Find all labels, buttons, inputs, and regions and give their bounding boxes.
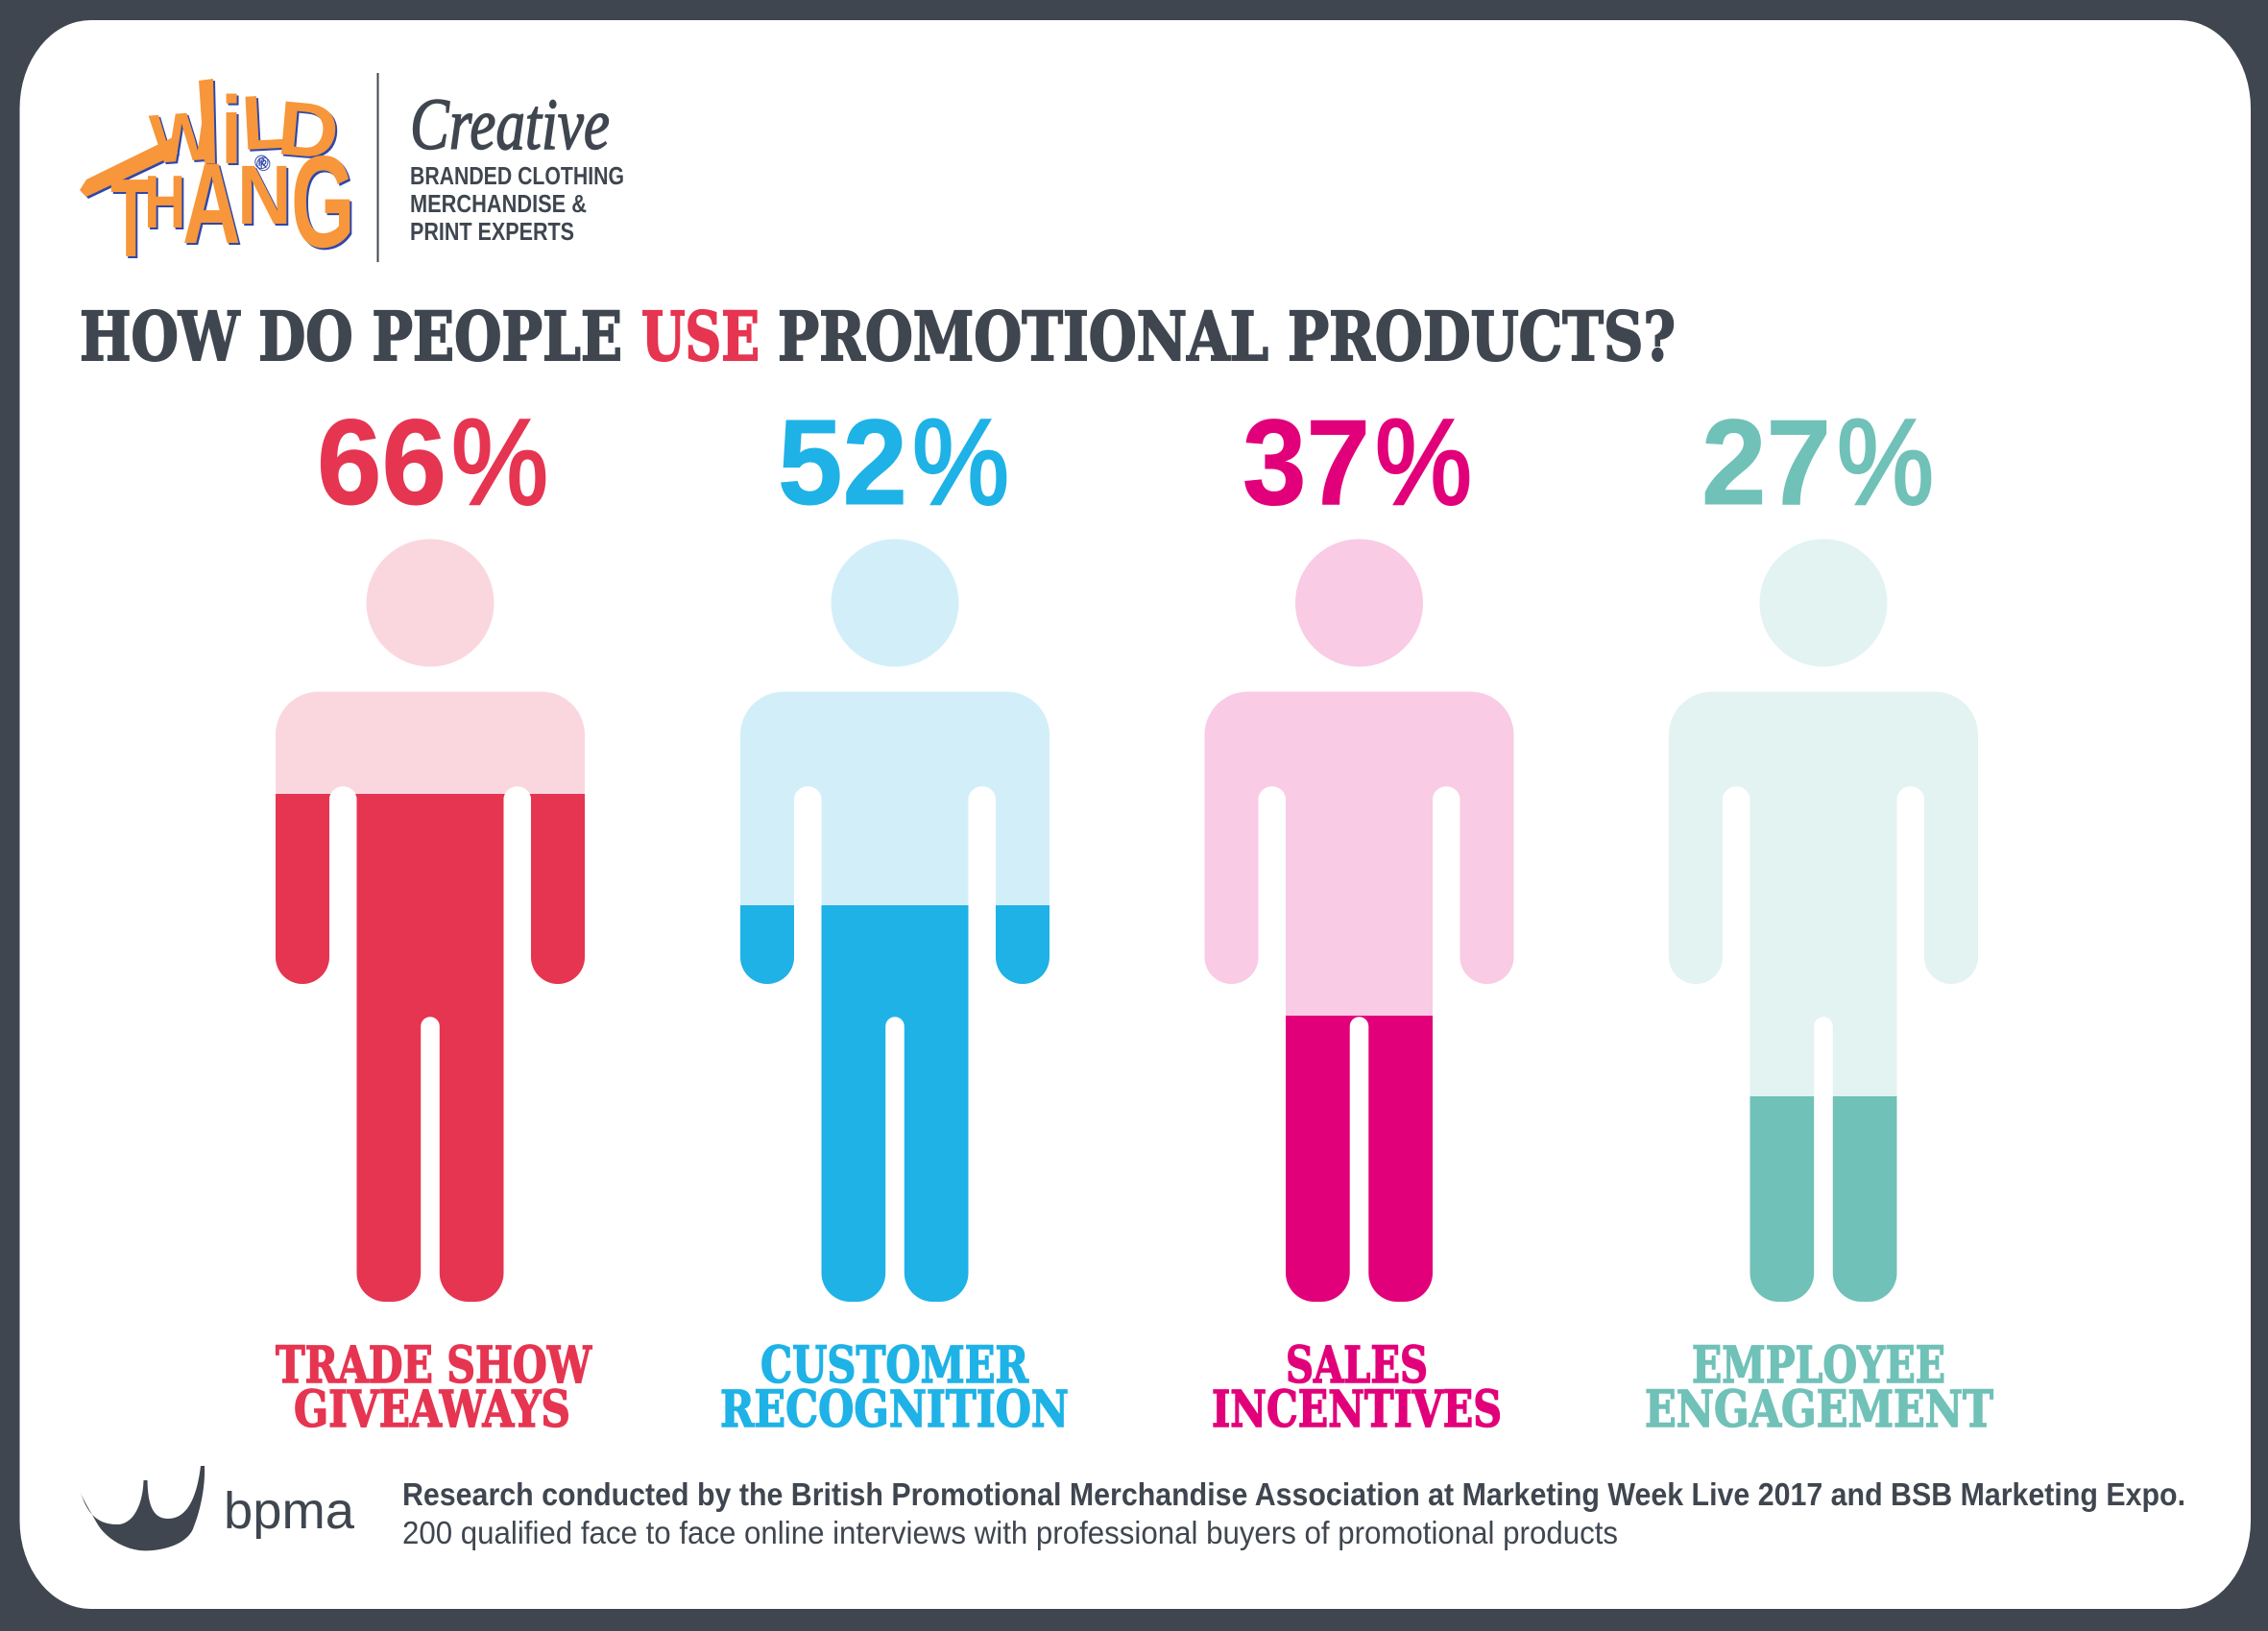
label: sales incentives: INCENTIVES — [1212, 1380, 1502, 1439]
label: trade show giveaways: GIVEAWAYS — [294, 1380, 570, 1439]
logo text: bpma: bpma — [224, 1482, 355, 1540]
logo: Wild Thang: A — [182, 138, 241, 267]
logo: Wild Thang: W — [148, 97, 218, 179]
title: PROMOTIONAL PRODUCTS? — [778, 297, 1676, 376]
percentage: 52% — [778, 395, 1009, 530]
percentage: 27% — [1701, 395, 1934, 530]
logo: Wild Thang: ® — [254, 153, 269, 174]
percentage: 37%: % — [1375, 395, 1472, 530]
person chart: 27% filled — [1669, 540, 1978, 1302]
brand tagline: Creative: Creative — [410, 84, 610, 165]
logo: Wild Thang: i — [221, 78, 242, 184]
logo: Wild Thang: G — [291, 130, 355, 276]
label: sales incentives: SALES — [1286, 1336, 1428, 1395]
title: USE — [641, 297, 760, 376]
percentage: 37%: 37 — [1243, 395, 1370, 530]
percentage: 52%: 52 — [778, 395, 907, 530]
title: HOW DO PEOPLE — [80, 297, 622, 376]
logo: Wild Thang — [80, 78, 355, 280]
percentage: 66%: % — [451, 395, 548, 530]
logo: Wild Thang: L — [239, 79, 291, 166]
label: customer recognition: CUSTOMER — [760, 1336, 1029, 1395]
logo: Wild Thang: H — [144, 159, 185, 244]
label: employee engagement: EMPLOYEE — [1692, 1336, 1945, 1395]
brand tagline: Creative: BRANDED CLOTHING — [410, 161, 624, 190]
person chart: 37% filled — [1204, 540, 1513, 1302]
percentage: 27%: 27 — [1701, 395, 1831, 530]
label: employee engagement: ENGAGEMENT — [1645, 1380, 1993, 1439]
person chart: 66% filled — [276, 540, 585, 1302]
logo: Wild Thang: D — [275, 84, 343, 176]
label: trade show giveaways — [276, 1336, 592, 1439]
person chart: 52% filled — [740, 540, 1050, 1302]
panel: sales incentives — [1204, 395, 1513, 1439]
panel: trade show giveaways — [276, 395, 592, 1439]
source note: 200 qualified face to face online interviews with professional buyers of promotional products — [402, 1515, 1618, 1550]
panel: employee engagement — [1645, 395, 1993, 1439]
panel: customer recognition — [720, 395, 1069, 1439]
percentage: 66%: 66 — [317, 395, 446, 530]
label: customer recognition: RECOGNITION — [720, 1380, 1069, 1439]
brand tagline: Creative: PRINT EXPERTS — [410, 217, 574, 246]
source note — [402, 1476, 2185, 1550]
logo: Wild Thang: T — [110, 156, 152, 280]
title — [80, 297, 1676, 376]
percentage: 27%: % — [1837, 395, 1934, 530]
label: trade show giveaways: TRADE SHOW — [276, 1336, 592, 1395]
label: employee engagement — [1645, 1336, 1993, 1439]
percentage: 52%: % — [912, 395, 1009, 530]
percentage: 66% — [317, 395, 548, 530]
logo: bpma crown — [80, 1466, 205, 1550]
logo: Wild Thang: N — [237, 148, 292, 242]
brand tagline: Creative — [410, 84, 624, 246]
brand tagline: Creative: MERCHANDISE & — [410, 189, 587, 218]
divider — [376, 73, 378, 262]
label: sales incentives — [1212, 1336, 1502, 1439]
label: customer recognition — [720, 1336, 1069, 1439]
percentage: 37% — [1243, 395, 1472, 530]
